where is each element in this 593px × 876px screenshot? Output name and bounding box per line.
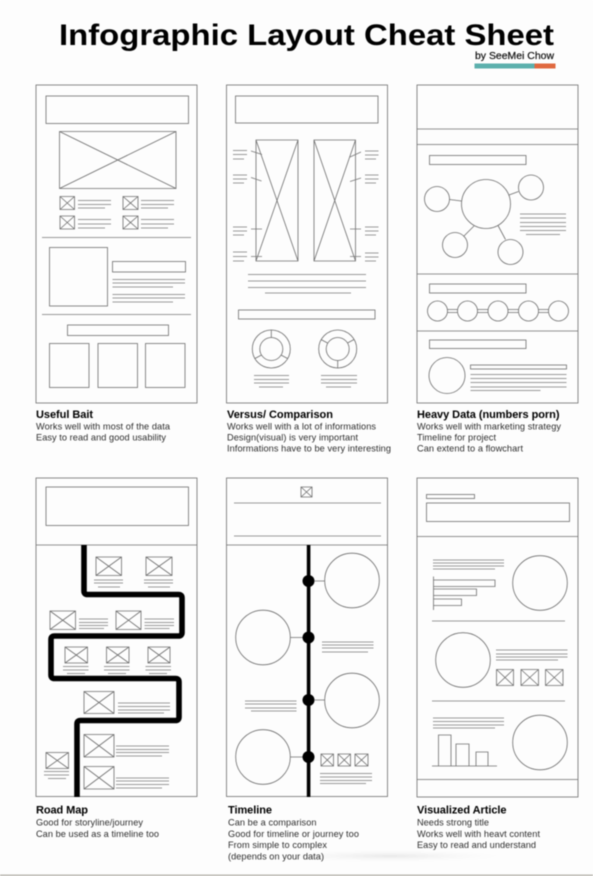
caption: timeline: Timeline [228,804,272,816]
caption: road map [36,804,159,839]
panel: versus comparison layout [226,85,388,403]
chain of circles [428,301,568,321]
donut right [319,330,357,387]
heading box 3 [430,340,526,348]
caption: versus comparison: Versus/ Comparison [227,409,333,421]
circle with text [429,358,566,394]
text block [112,262,186,302]
text lines [520,214,566,234]
right callouts [350,151,378,261]
caption: heavy data [417,409,561,454]
vertical bar chart [432,718,504,766]
summary lines [248,274,366,293]
caption: timeline: From simple to complex [228,840,327,850]
caption: useful bait: Useful Bait [36,409,93,421]
caption: useful bait: Works well with most of the data [36,422,171,432]
text right [322,642,374,652]
right comparison column [314,140,356,261]
caption: visualized article: Easy to read and understand [417,840,536,850]
caption: visualized article: Visualized Article [417,804,506,816]
hub and spoke diagram [424,175,544,264]
small title box [426,494,474,498]
title: Infographic Layout Cheat Sheet [59,19,554,52]
connectors [290,581,324,757]
caption: road map: Road Map [36,804,88,816]
three squares [50,344,185,388]
final icons and text [320,754,372,784]
panel: road map layout [36,478,197,797]
caption: timeline: Can be a comparison [228,818,316,828]
road path [51,545,182,797]
timeline spine [302,545,314,797]
author colour bar [474,64,556,68]
header box [236,96,378,123]
road stop row 6 [84,766,169,789]
timeline circles [236,553,379,784]
caption: timeline: Good for timeline or journey too [228,829,359,839]
road stop row 5 [84,734,169,757]
road stop row 1 [94,557,173,587]
left callouts [233,150,262,261]
caption: heavy data: Timeline for project [417,432,496,442]
caption: heavy data: Can extend to a flowchart [417,444,523,454]
caption: road map: Good for storyline/journey [36,818,143,828]
image square [50,248,108,306]
caption: versus comparison: Design(visual) is very important [227,432,358,442]
caption: heavy data: Heavy Data (numbers porn) [417,409,560,421]
side stop [44,752,69,778]
sub-heading box [68,325,168,336]
caption: heavy data: Works well with marketing strategy [417,422,561,432]
road stop row 4 [84,692,170,714]
caption: versus comparison: Informations have to be very interesting [227,444,391,454]
heading box 2 [430,284,526,293]
title box [426,503,570,522]
caption: timeline: (depends on your data) [228,852,324,862]
caption: versus comparison [227,409,391,454]
header icon [301,487,312,497]
panel: heavy data layout [417,85,578,403]
header box [46,487,188,526]
panel: visualized article layout [417,478,578,797]
wide heading box [238,310,375,319]
road stop row 2 [50,611,174,630]
road stop row 3 [63,647,171,674]
circle 2 [436,633,490,687]
panel: useful bait layout [36,85,197,403]
caption: visualized article: Works well with heavt content [417,829,540,839]
caption: useful bait: Easy to read and good usability [36,432,166,442]
panel: timeline layout [226,478,388,797]
header box [46,96,188,124]
text left [245,701,296,711]
left comparison column [256,140,298,261]
circle 3 [513,715,567,770]
hero image placeholder [60,132,176,188]
text and icons [496,650,568,686]
circle 1 [513,556,567,610]
caption: visualized article [417,804,540,850]
byline: by SeeMei Chow [475,51,555,62]
caption: road map: Can be used as a timeline too [36,829,159,839]
caption: useful bait [36,409,171,442]
horizontal bar chart [433,560,504,610]
caption: visualized article: Needs strong title [417,818,489,828]
heading box 1 [430,156,526,164]
caption: versus comparison: Works well with a lot of informations [227,422,376,432]
four small icons with text [60,196,174,229]
caption: timeline [228,804,359,862]
donut left [252,330,290,387]
